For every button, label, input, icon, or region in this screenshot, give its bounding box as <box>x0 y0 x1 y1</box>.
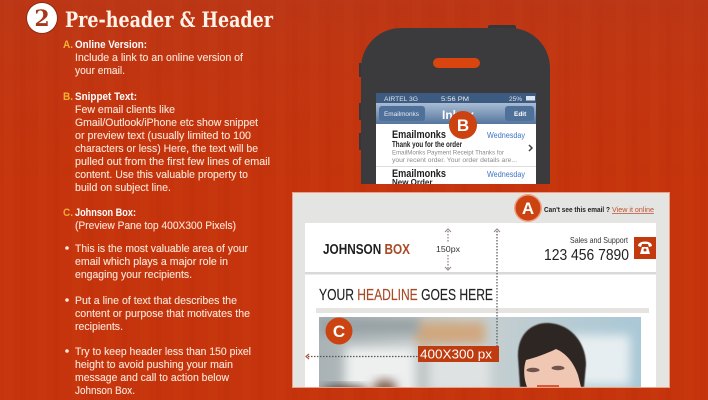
text block: snippet text: content. Use this valuable property to <box>75 169 248 181</box>
bullet: header height: height to avoid pushing your main <box>75 359 233 371</box>
bullet: most valuable area: engaging your recipients. <box>75 269 192 281</box>
phone speaker <box>433 58 480 68</box>
marker B <box>449 111 477 139</box>
bullet: header height <box>65 346 251 397</box>
phone screen: Emailmonks <box>392 129 446 141</box>
bullet: most valuable area <box>65 243 248 281</box>
text block: johnson box <box>63 207 236 232</box>
phone screen: Emailmonks <box>384 112 419 118</box>
dimension: 300px height <box>494 229 500 346</box>
bullet: line of text: Put a line of text that describes the <box>75 295 237 307</box>
phone screen: Emailmonks <box>392 168 446 180</box>
phone screen: EmailMonks Payment Receipt Thanks for <box>392 150 505 156</box>
bullet: line of text: recipients. <box>75 321 123 333</box>
marker C <box>326 318 352 344</box>
phone screen: Edit <box>514 111 527 118</box>
online version link: View it online <box>612 205 654 214</box>
text block: snippet text <box>63 91 270 194</box>
step number badge <box>26 2 58 34</box>
email preview panel <box>292 192 670 398</box>
marker B: B <box>457 116 469 135</box>
text block: online version: your email. <box>75 65 125 77</box>
dimension: 150px: 150px <box>436 245 460 254</box>
text block: snippet text: build on subject line. <box>75 182 171 194</box>
email body <box>305 223 656 387</box>
text block: online version: A. <box>63 39 73 51</box>
text block: snippet text: pulled out from the first few lines of email <box>75 156 270 168</box>
phone screen: AIRTEL 3G <box>384 96 418 103</box>
contact details: Sales and Support <box>570 235 629 245</box>
bullet: line of text <box>65 295 250 333</box>
phone screen: 25% <box>509 96 522 103</box>
phone screen: Thank you for the order <box>392 140 462 149</box>
phone screen: Wednesday <box>487 170 525 179</box>
phone screen: your recent order. Your order details are... <box>392 157 517 164</box>
online version link: Can't see this email ? <box>544 205 610 214</box>
phone screen <box>376 93 536 187</box>
text block: snippet text: Snippet Text: <box>75 91 137 103</box>
phone screen: 5:56 PM <box>441 96 469 103</box>
text block: online version: Online Version: <box>75 39 147 51</box>
contact details: 123 456 7890 <box>544 247 629 264</box>
text block: johnson box: (Preview Pane top 400X300 Pixels) <box>75 220 236 232</box>
marker A <box>514 194 542 222</box>
phone screen: Inbox <box>442 108 474 122</box>
text block: snippet text: Gmail/Outlook/iPhone etc show snippet <box>75 117 258 129</box>
bullet: most valuable area: This is the most valuable area of your <box>75 243 248 255</box>
text block: snippet text: or preview text (usually limited to 100 <box>75 130 251 142</box>
title: Pre-header & Header <box>65 8 274 33</box>
headline: YOUR HEADLINE GOES HERE <box>319 287 493 304</box>
hero photo <box>319 317 641 387</box>
icon: telephone <box>634 237 656 259</box>
phone screen: Wednesday <box>487 131 525 140</box>
woman portrait <box>518 323 586 388</box>
johnson box logo: JOHNSON BOX <box>323 242 410 258</box>
dimension: 150px <box>435 229 461 270</box>
text block: johnson box: Johnson Box: <box>75 207 136 219</box>
bullet: header height: Johnson Box. <box>75 385 135 397</box>
online version link <box>544 205 654 214</box>
text block: online version <box>63 39 244 77</box>
phone screen: New Order <box>392 178 432 187</box>
marker C: C <box>333 322 345 341</box>
text block: johnson box: C. <box>63 207 73 219</box>
text block: snippet text: Few email clients like <box>75 104 175 116</box>
text block: snippet text: characters or less) Here, the text will be <box>75 143 258 155</box>
phone mockup <box>359 25 550 184</box>
contact details <box>544 235 629 264</box>
dimension: 400px width <box>306 354 418 359</box>
marker A: A <box>522 199 534 218</box>
size label: 400X300 px <box>420 348 493 362</box>
step number badge: 2 <box>34 6 50 32</box>
text block: snippet text: B. <box>63 91 73 103</box>
text block: online version: Include a link to an online version of <box>75 52 244 64</box>
bullet: header height: message and call to action below <box>75 372 229 384</box>
bullet: most valuable area: email which plays a major role in <box>75 256 228 268</box>
bullet: line of text: content or purpose that motivates the <box>75 308 250 320</box>
bullet: header height: Try to keep header less than 150 pixel <box>75 346 251 358</box>
